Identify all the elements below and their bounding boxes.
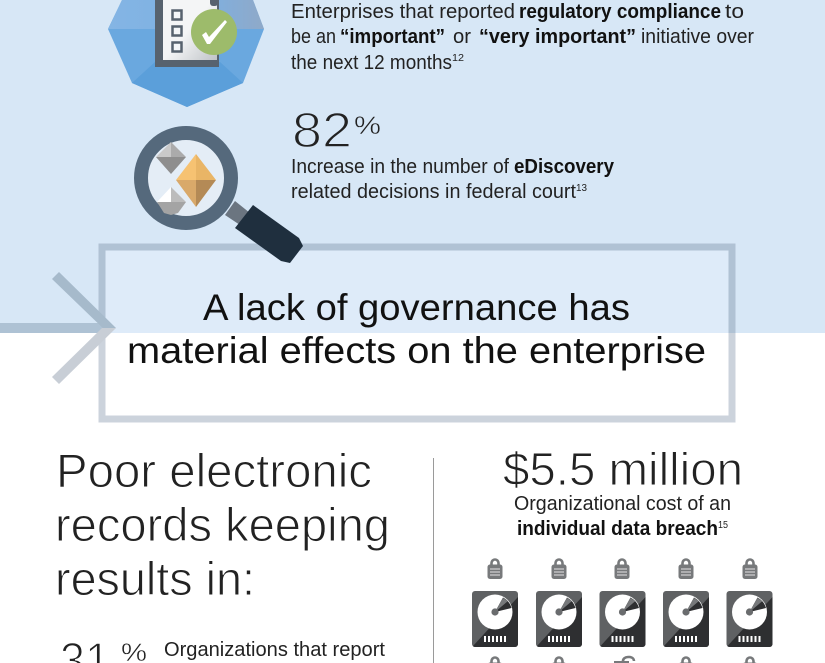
heading: poor electronic records keeping: Poor electronic	[56, 444, 372, 497]
text block: eDiscovery statistic: 13	[576, 183, 587, 194]
text block: regulatory compliance statistic: “very important”	[479, 26, 636, 48]
text block: regulatory compliance statistic: initiative over	[641, 26, 754, 48]
callout box with arrow	[0, 247, 732, 419]
statistic: 31 percent: Organizations that report	[164, 639, 385, 661]
text block: regulatory compliance statistic: be an	[291, 26, 336, 48]
text block: regulatory compliance statistic	[291, 1, 754, 74]
heading: poor electronic records keeping	[55, 444, 390, 605]
statistic: cost of a data breach: 15	[718, 520, 728, 531]
statistic: cost of a data breach	[503, 443, 743, 540]
text block: eDiscovery statistic: 82	[292, 104, 352, 158]
callout heading: A lack of governance has	[203, 287, 630, 328]
text block: regulatory compliance statistic: Enterprises that reported	[291, 1, 515, 23]
text block: eDiscovery statistic	[291, 104, 615, 203]
callout heading	[127, 287, 706, 371]
text block: regulatory compliance statistic: or	[453, 26, 471, 48]
heading: poor electronic records keeping: records keeping	[55, 498, 390, 551]
statistic: cost of a data breach: individual data breach	[517, 518, 718, 540]
text block: regulatory compliance statistic: 12	[452, 53, 464, 64]
text block: eDiscovery statistic: related decisions in federal court	[291, 181, 576, 203]
heading: poor electronic records keeping: results in:	[55, 552, 255, 605]
text block: regulatory compliance statistic: the next 12 months	[291, 52, 452, 74]
icon: compliance checklist badge	[108, 0, 264, 107]
callout heading: material effects on the enterprise	[127, 330, 706, 371]
icon grid: locked hard drives	[472, 560, 772, 663]
statistic: 31 percent	[60, 634, 385, 663]
text block: regulatory compliance statistic: to	[725, 1, 744, 23]
text block: eDiscovery statistic: Increase in the number of	[291, 156, 509, 178]
text block: regulatory compliance statistic: “important”	[340, 26, 445, 48]
icon: magnifying glass over diamonds	[141, 133, 303, 263]
top blue background panel	[0, 0, 825, 333]
text block: eDiscovery statistic: %	[354, 112, 381, 140]
statistic: cost of a data breach: $5.5 million	[503, 443, 743, 495]
text block: eDiscovery statistic: eDiscovery	[514, 156, 615, 178]
text block: regulatory compliance statistic: regulatory compliance	[519, 1, 721, 23]
statistic: cost of a data breach: Organizational cost of an	[514, 493, 731, 515]
